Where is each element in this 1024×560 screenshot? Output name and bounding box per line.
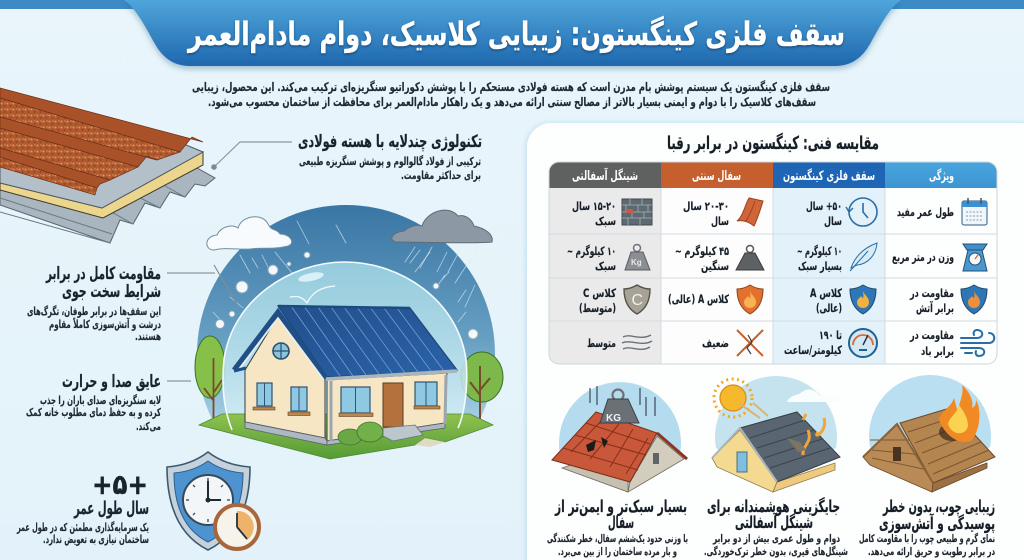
icon: feather bbox=[850, 243, 877, 271]
row: wind resistance: کیلومتر/ساعت bbox=[784, 343, 842, 358]
panel: comparison bbox=[527, 123, 1024, 560]
row: wind resistance bbox=[587, 328, 954, 358]
callout: multilayer technology bbox=[211, 132, 482, 182]
feature card: lighter than tile: با وزنی حدود یک‌ششم سفال، خطر شکنندگی bbox=[547, 532, 688, 545]
callout: sound and heat insulation bbox=[26, 372, 191, 433]
callout: multilayer technology: برای حداکثر مقاومت. bbox=[401, 169, 481, 182]
dome outline and highlights bbox=[223, 262, 467, 430]
steel layer bbox=[0, 130, 203, 208]
lifespan stat: +۵+ bbox=[92, 468, 148, 501]
feature card: asphalt shingle alternative bbox=[704, 376, 848, 558]
row: lifespan bbox=[572, 199, 954, 228]
bushes bbox=[338, 429, 362, 445]
feature card: asphalt shingle alternative: شینگل آسفالتی bbox=[735, 511, 813, 532]
illustration: cracked tile roof under weight bbox=[552, 382, 687, 492]
illustration: burning wooden roof bbox=[863, 375, 995, 492]
right dark cloud bbox=[392, 210, 492, 243]
row: lifespan: ۲۰-۳۰ سال bbox=[683, 199, 729, 213]
glass dome bbox=[223, 262, 467, 446]
walls bbox=[245, 316, 325, 438]
table header: شینگل آسفالتی bbox=[572, 167, 638, 184]
icon: cracked tile bbox=[737, 330, 763, 356]
row: lifespan: سال bbox=[824, 214, 842, 228]
house bbox=[234, 306, 457, 445]
icon: heavy weight bbox=[736, 246, 764, 270]
feature card: lighter than tile bbox=[547, 382, 688, 558]
row: weight bbox=[567, 244, 954, 273]
callout: sound and heat insulation: لایه سنگریزه‌ای صدای باران را جذب bbox=[40, 394, 161, 407]
row: fire resistance: کلاس A (عالی) bbox=[668, 292, 729, 306]
card heading and text: جایگزینی هوشمندانه برای bbox=[707, 496, 840, 517]
row: fire resistance bbox=[579, 286, 954, 316]
lifespan stat: ساختمان نیازی به تعویض ندارد. bbox=[43, 533, 149, 546]
callout: weather resistance: درشت و آتش‌سوزی کاملاً مقاوم bbox=[49, 316, 161, 331]
row: lifespan: سبک bbox=[595, 214, 616, 228]
callout: sound and heat insulation: می‌کند. bbox=[136, 420, 161, 433]
row: weight: سنگین bbox=[701, 259, 729, 273]
lifespan stat: یک سرمایه‌گذاری مطمئن که در طول عمر bbox=[16, 521, 149, 534]
feature card: lighter than tile: سفال bbox=[608, 513, 634, 532]
callout: weather resistance: شرایط سخت جوی bbox=[62, 282, 161, 302]
left tree bbox=[195, 336, 225, 422]
row: lifespan: سال bbox=[711, 214, 729, 228]
row: weight: ۱۰ کیلوگرم ~ bbox=[797, 244, 842, 259]
illustration: cracked tile roof under weight: KG bbox=[606, 413, 621, 424]
icon: scale bbox=[963, 244, 987, 271]
row: fire resistance: کلاس A bbox=[810, 286, 842, 300]
icon: kg weight bbox=[625, 244, 650, 270]
row: fire resistance: کلاس C bbox=[583, 286, 616, 300]
table header: ویژگی bbox=[929, 168, 954, 184]
table header: سقف فلزی کینگستون bbox=[783, 168, 875, 184]
row: lifespan: ۱۵-۲۰ سال bbox=[572, 199, 616, 213]
hail stones bbox=[216, 252, 478, 339]
row: fire resistance: مقاومت در bbox=[909, 286, 954, 301]
table header: سفال سنتی bbox=[692, 169, 741, 184]
callout: multilayer technology: ترکیبی از فولاد گالوالوم و پوشش سنگریزه طبیعی bbox=[299, 155, 481, 168]
row: wind resistance: برابر باد bbox=[921, 344, 954, 358]
row: wind resistance: ضعیف bbox=[702, 336, 729, 350]
door bbox=[383, 383, 403, 427]
icon: brick wall bbox=[622, 199, 652, 225]
terracotta top layer bbox=[0, 88, 203, 195]
gutter bbox=[326, 371, 457, 379]
top band bbox=[0, 0, 1024, 9]
insulation layer bbox=[0, 152, 203, 218]
feature card: wood beauty bbox=[859, 375, 995, 558]
row: weight: ۴۵ کیلوگرم ~ bbox=[675, 244, 729, 259]
windows bbox=[257, 382, 437, 413]
gable trim bbox=[234, 312, 326, 379]
row: lifespan: ۵۰+ سال bbox=[806, 199, 842, 213]
table header bbox=[572, 167, 954, 184]
card heading and text: بسیار سبک‌تر و ایمن‌تر از bbox=[554, 497, 687, 517]
icon: kg weight: Kg bbox=[631, 258, 642, 267]
icon: gentle wind bbox=[622, 335, 652, 349]
row: weight: وزن در متر مربع bbox=[892, 250, 954, 265]
callout: weather resistance: مقاومت کامل در برابر bbox=[45, 264, 161, 284]
feature card: asphalt shingle alternative: شینگل‌های قیری، بدون خطر ترک‌خوردگی. bbox=[704, 545, 848, 558]
row: weight: بسیار سبک bbox=[798, 259, 842, 273]
icon: fire shield bbox=[961, 285, 987, 314]
icon: class C shield bbox=[624, 285, 650, 314]
icon: class C shield: C bbox=[632, 292, 643, 309]
icon: wind bbox=[961, 330, 994, 356]
row: lifespan: طول عمر مفید bbox=[897, 205, 954, 220]
feature card: asphalt shingle alternative: دوام و طول عمری بیش از دو برابر bbox=[712, 533, 840, 545]
lifespan stat: سال طول عمر bbox=[73, 498, 149, 519]
icon: speed gauge bbox=[849, 329, 877, 357]
icon: orange fire shield bbox=[737, 285, 763, 314]
layered roof sheet illustration bbox=[0, 88, 215, 243]
icon: clock with arrow bbox=[846, 198, 877, 226]
left cloud bbox=[207, 217, 292, 250]
row: fire resistance: (عالی) bbox=[816, 301, 842, 315]
row: fire resistance: برابر آتش bbox=[916, 301, 954, 315]
row: wind resistance: متوسط bbox=[587, 336, 616, 351]
row: fire resistance: (متوسط) bbox=[579, 301, 616, 316]
icon: clay tile bbox=[737, 198, 763, 226]
steps bbox=[383, 425, 423, 441]
callout: sound and heat insulation: عایق صدا و حرارت bbox=[62, 372, 161, 392]
comparison heading: مقایسه فنی: کینگستون در برابر رقبا bbox=[667, 132, 879, 154]
round window bbox=[273, 343, 289, 359]
callout stem bbox=[214, 265, 238, 306]
callout: weather resistance: این سقف‌ها در برابر طوفان، تگرگ‌های bbox=[27, 304, 161, 318]
intro paragraph bbox=[192, 80, 830, 110]
central house under dome illustration bbox=[194, 205, 504, 460]
feature card: lighter than tile: و بار مرده ساختمان را از بین می‌برد. bbox=[558, 546, 677, 558]
bottom corrugated steel bbox=[0, 168, 215, 243]
stormy sky circle bbox=[197, 205, 495, 418]
lifespan stat bbox=[16, 468, 149, 546]
comparison table bbox=[549, 162, 997, 364]
callout: multilayer technology: تکنولوژی چندلایه با هسته فولادی bbox=[298, 132, 482, 152]
row: weight: ۱۰ کیلوگرم ~ bbox=[567, 244, 616, 259]
ground bbox=[199, 414, 493, 459]
title banner bbox=[124, 0, 901, 66]
right tree bbox=[461, 352, 503, 421]
icon: blue fire shield bbox=[850, 285, 876, 314]
illustration: worn shingle roof bbox=[712, 376, 840, 492]
callout: sound and heat insulation: کرده و به حفظ دمای مطلوب خانه کمک bbox=[26, 406, 161, 419]
icon: shield with clocks bbox=[167, 452, 259, 550]
row: wind resistance: مقاومت در bbox=[909, 328, 954, 343]
blue metal roof bbox=[278, 306, 457, 377]
row: weight: سبک bbox=[595, 259, 616, 273]
icon: calendar bbox=[962, 198, 987, 225]
rain bbox=[213, 221, 478, 324]
callout: weather resistance: هستند. bbox=[135, 330, 161, 343]
callout: weather resistance bbox=[27, 264, 215, 343]
row: wind resistance: تا ۱۹۰ bbox=[819, 328, 842, 342]
